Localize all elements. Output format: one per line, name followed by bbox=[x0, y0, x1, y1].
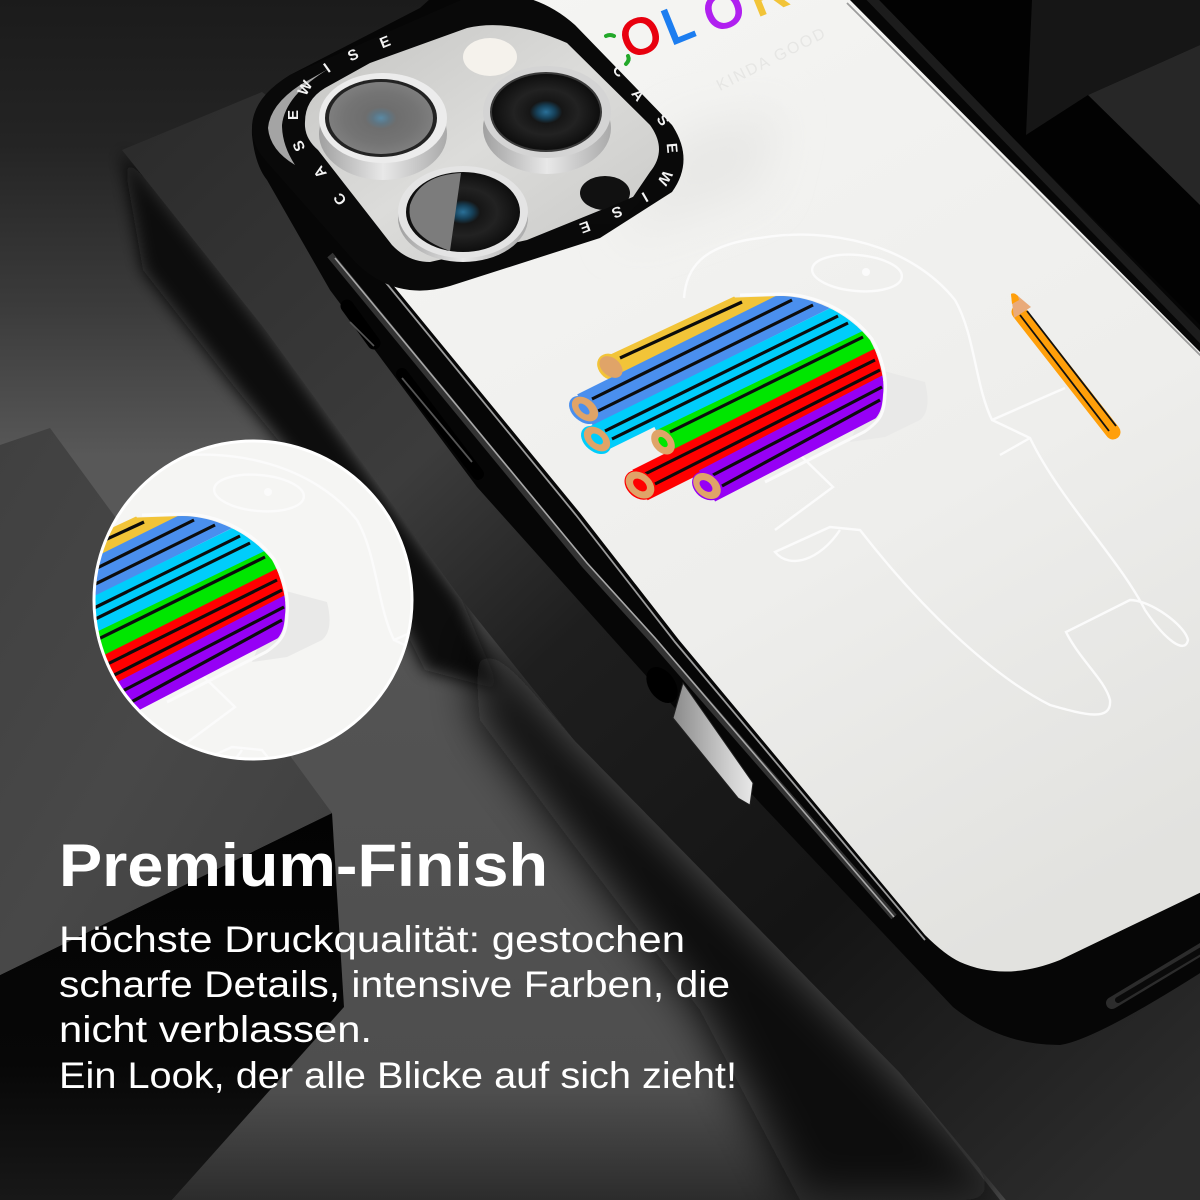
circle magnified artwork bbox=[96, 516, 330, 710]
body copy: Ein Look, der alle Blicke auf sich zieht! bbox=[59, 1055, 737, 1096]
phone bbox=[252, 0, 1200, 1045]
casewise lettering: E bbox=[663, 142, 680, 154]
camera bump crescent bbox=[268, 68, 330, 165]
background: left block front bbox=[0, 813, 344, 1200]
camera shadow bbox=[620, 110, 780, 240]
casewise lettering: S bbox=[653, 111, 672, 129]
casewise lettering: W bbox=[653, 167, 675, 189]
casewise lettering: I bbox=[321, 60, 334, 77]
lens top right bbox=[483, 66, 611, 174]
artwork: dino and pencils bbox=[564, 232, 1188, 715]
colour logo bbox=[612, 0, 795, 69]
phone case highlight bbox=[335, 258, 894, 917]
logo tagline: KINDA GOOD bbox=[714, 24, 830, 95]
phone case outer bevel bbox=[330, 255, 894, 917]
casewise lettering: S bbox=[290, 138, 309, 154]
body copy: Höchste Druckqualität: gestochen bbox=[59, 919, 685, 960]
circle ring bbox=[94, 441, 412, 759]
charging port bbox=[1112, 947, 1200, 1003]
logo green dots bbox=[606, 35, 629, 64]
casewise lettering: S bbox=[345, 46, 361, 65]
side button small bbox=[347, 306, 374, 346]
lens bottom bbox=[398, 166, 528, 262]
background: dark band bbox=[470, 620, 1010, 1200]
background: floor plane bbox=[172, 480, 1000, 1200]
small pencil bbox=[1011, 293, 1116, 432]
casewise lettering: C bbox=[330, 189, 350, 208]
casewise lettering: E bbox=[377, 33, 393, 52]
body copy: nicht verblassen. bbox=[59, 1009, 372, 1050]
circle base bbox=[93, 440, 413, 760]
casewise lettering: W bbox=[295, 77, 317, 99]
casewise lettering: E bbox=[285, 110, 302, 120]
phone screen back bbox=[340, 0, 1200, 972]
phone case body bbox=[252, 0, 1200, 1045]
body copy: scharfe Details, intensive Farben, die bbox=[59, 964, 730, 1005]
camera bump outer bbox=[252, 0, 684, 291]
side button silver bbox=[673, 683, 753, 805]
camera flash bbox=[463, 38, 517, 76]
background: top-right block bbox=[1088, 45, 1200, 205]
casewise lettering bbox=[285, 33, 680, 236]
heading: Premium-Finish bbox=[59, 832, 548, 899]
casewise lettering: C bbox=[609, 62, 629, 81]
text block bbox=[59, 832, 737, 1096]
body copy bbox=[59, 919, 737, 1096]
screen edge line bbox=[378, 3, 1200, 940]
casewise lettering: E bbox=[577, 217, 592, 236]
camera window bbox=[305, 25, 659, 262]
background: left block top bbox=[0, 428, 332, 975]
casewise lettering: A bbox=[310, 162, 330, 181]
phone case right strip bbox=[868, 0, 1200, 342]
background: block front shadow bbox=[122, 150, 500, 690]
background: top-right panel bbox=[1026, 0, 1200, 135]
mic hole bbox=[570, 176, 650, 224]
zoom circle bbox=[92, 440, 414, 760]
side button long bbox=[402, 374, 478, 474]
casewise lettering: A bbox=[628, 86, 648, 105]
background: black gap top-right bbox=[850, 0, 1200, 420]
casewise lettering: S bbox=[609, 202, 624, 221]
lens top left bbox=[319, 73, 447, 180]
side button hole bbox=[640, 661, 684, 709]
casewise lettering: I bbox=[639, 188, 651, 205]
colour logo: O bbox=[612, 3, 669, 69]
